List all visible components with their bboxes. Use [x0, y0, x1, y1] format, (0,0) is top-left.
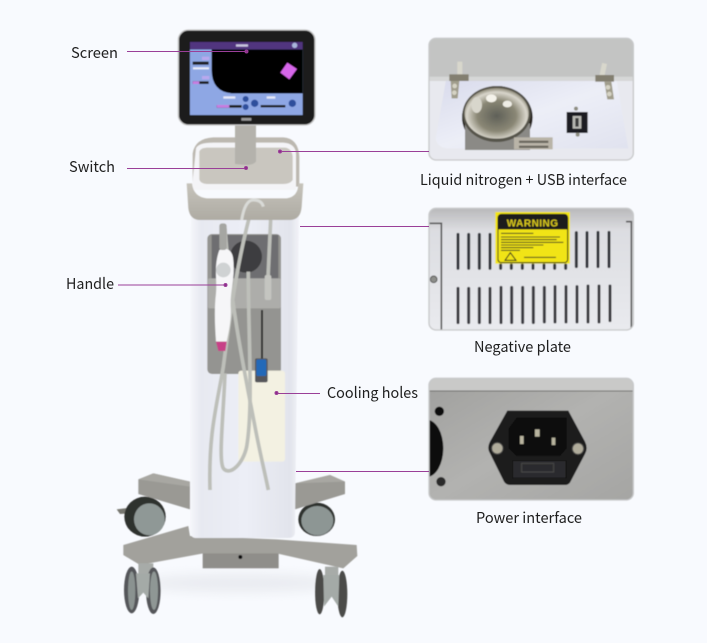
- rear right wheel: [298, 503, 335, 536]
- hose top loop: [242, 200, 263, 220]
- hand piece: [215, 223, 234, 351]
- leader: switch: [127, 166, 248, 170]
- front right wheel: [315, 567, 347, 617]
- header label: [236, 44, 248, 47]
- top edge: [429, 378, 633, 391]
- display black area: [212, 49, 303, 93]
- leader: liquid nitrogen: [278, 150, 429, 153]
- pink shape: [280, 63, 297, 79]
- mounting holes: [435, 407, 444, 416]
- leader lines and dots: [118, 50, 429, 472]
- leader: negative plate: [300, 226, 429, 228]
- warning small text: [501, 233, 563, 257]
- device: [117, 30, 357, 617]
- right hinge: [595, 63, 614, 99]
- recess shading: [212, 235, 278, 278]
- USB port: [567, 107, 588, 137]
- panel: negative plate: [429, 208, 633, 330]
- panel border: [429, 208, 633, 330]
- warning title: WARNING: [507, 219, 559, 230]
- fan opening: [429, 420, 444, 477]
- socket: [488, 411, 587, 485]
- rear left wheel: [117, 497, 166, 537]
- recess: [207, 234, 281, 374]
- floor shadow: [140, 574, 340, 592]
- pad: [238, 371, 285, 462]
- steel bowl: [462, 86, 553, 150]
- cavity: [444, 81, 498, 102]
- label: handle: Handle: [66, 273, 114, 294]
- warning triangle: [505, 253, 516, 260]
- hose clip: [265, 275, 271, 300]
- lid edge: [429, 77, 633, 81]
- pad cable connector: [255, 310, 268, 382]
- display header: [190, 42, 303, 49]
- device: column body: [190, 215, 299, 538]
- handle frame: [193, 137, 299, 187]
- device: tray: [187, 123, 303, 220]
- warning label: [495, 212, 570, 264]
- upper vents: [458, 232, 609, 268]
- left sliders: [193, 57, 209, 84]
- hoses: [210, 200, 271, 490]
- device: handle bay: [207, 200, 285, 490]
- control panel: [199, 148, 293, 184]
- logo: [241, 118, 251, 121]
- plate: [429, 208, 633, 330]
- neck: [235, 123, 256, 165]
- leader: power interface: [296, 470, 429, 472]
- lower vents: [458, 286, 610, 323]
- leader: handle: [118, 284, 227, 286]
- panel border: [429, 38, 633, 160]
- panel border: [429, 378, 633, 500]
- side rails: [429, 222, 631, 330]
- device: cart base and wheels: [117, 473, 357, 617]
- lower controls: [217, 96, 296, 110]
- rear arms: [138, 473, 345, 509]
- display blue panel: [190, 49, 303, 115]
- panel face: [429, 391, 634, 500]
- label: power interface: Power interface: [476, 507, 582, 528]
- device: screen: [178, 30, 315, 125]
- front left wheel: [124, 563, 161, 614]
- panel: liquid nitrogen and USB: [429, 38, 633, 160]
- control top: [192, 143, 296, 190]
- round holster: [230, 241, 262, 273]
- label: screen: Screen: [71, 42, 118, 63]
- lid: [429, 38, 633, 78]
- header button: [292, 43, 297, 48]
- tray cup: [187, 183, 303, 220]
- screw: [430, 276, 437, 283]
- label: switch: Switch: [69, 156, 115, 177]
- panel: power interface: [410, 378, 633, 500]
- bottom plate: [203, 550, 279, 568]
- left hinge: [449, 62, 469, 98]
- label: cooling holes: Cooling holes: [327, 382, 418, 403]
- panel backdrop: [430, 81, 632, 160]
- label: negative plate: Negative plate: [474, 336, 571, 357]
- holder bracket: [208, 278, 281, 308]
- bezel: [178, 30, 315, 125]
- leader: screen: [127, 50, 248, 53]
- front arms: [123, 526, 357, 568]
- label: liquid nitrogen + USB interface: Liquid nitrogen + USB interface: [420, 169, 627, 190]
- labels: [66, 42, 627, 528]
- leader: cooling holes: [275, 392, 320, 394]
